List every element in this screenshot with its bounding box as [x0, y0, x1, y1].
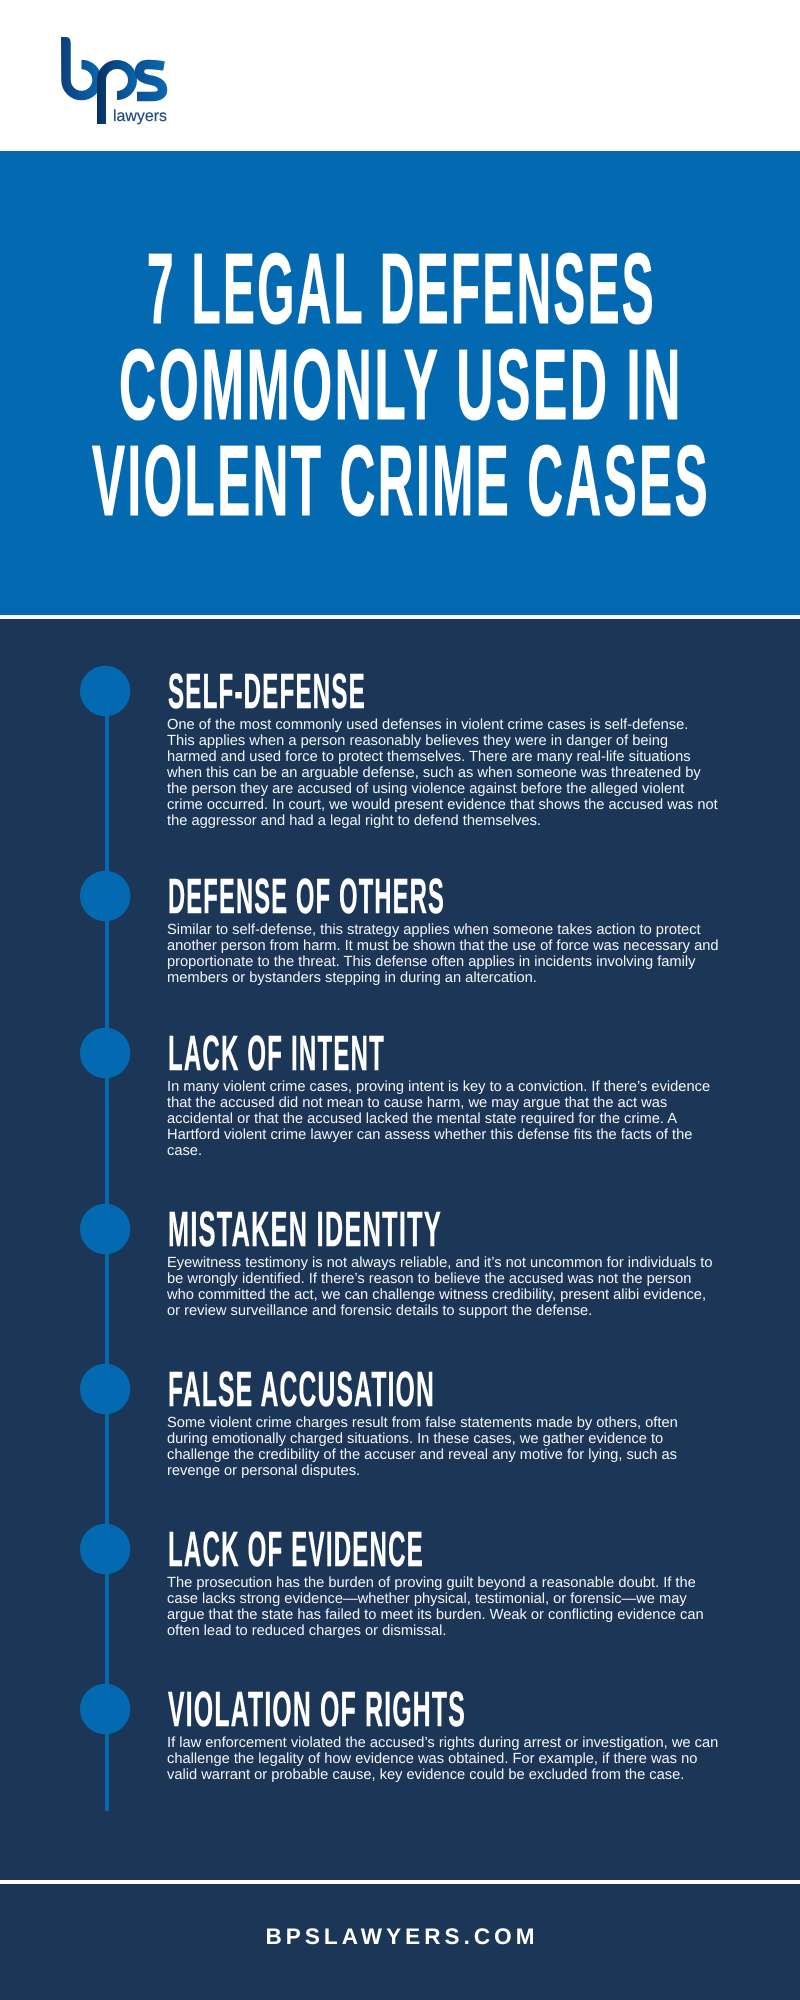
- defense: lack of intent: case.: [167, 1143, 202, 1159]
- defense: self-defense: One of the most commonly used defenses in violent crime cases is self-defense.: [167, 717, 688, 733]
- defense: defense of others: [80, 869, 723, 986]
- defense: mistaken identity: or review surveillance and forensic details to support the defense.: [167, 1303, 592, 1319]
- defense: lack of intent: [80, 1026, 714, 1159]
- defense: false accusation: Some violent crime charges result from false statements made by others, often: [167, 1415, 678, 1431]
- defense: defense of others: proportionate to the threat. This defense often applies in incidents involving family: [167, 954, 696, 970]
- defense: lack of intent: that the accused did not mean to cause harm, we may argue that the act was: [167, 1095, 667, 1111]
- defense: lack of evidence: [80, 1522, 708, 1639]
- defense: lack of evidence: case lacks strong evidence—whether physical, testimonial, or forensic—we may: [167, 1591, 687, 1607]
- defense: defense of others: DEFENSE OF OTHERS: [168, 869, 445, 924]
- defense: lack of intent: accidental or that the accused lacked the mental state required for the crime. A: [167, 1111, 677, 1127]
- defense: lack of evidence: LACK OF EVIDENCE: [168, 1522, 424, 1577]
- logo: bps lawyers: [61, 37, 167, 125]
- defense: false accusation: during emotionally charged situations. In these cases, we gather evidence to: [167, 1431, 663, 1447]
- defense: mistaken identity: MISTAKEN IDENTITY: [168, 1202, 442, 1257]
- timeline line: [105, 691, 109, 1811]
- defense: self-defense: crime occurred. In court, we would present evidence that shows the accused was not: [167, 797, 718, 813]
- defense: lack of evidence: often lead to reduced charges or dismissal.: [167, 1623, 446, 1639]
- footer: BPSLAWYERS.COM: [266, 1924, 534, 1949]
- defense: self-defense: [80, 664, 722, 829]
- defense: violation of rights: If law enforcement violated the accused’s rights during arrest or investigation, we can: [167, 1735, 718, 1751]
- defense: self-defense: the aggressor and had a legal right to defend themselves.: [167, 813, 541, 829]
- defense: false accusation: FALSE ACCUSATION: [168, 1362, 435, 1417]
- defense: self-defense: harmed and used force to protect themselves. There are many real-life situations: [167, 749, 691, 765]
- defense: self-defense: the person they are accused of using violence against before the alleged violent: [167, 781, 684, 797]
- defense: false accusation: [80, 1362, 682, 1479]
- defense: self-defense: This applies when a person reasonably believes they were in danger of being: [167, 733, 668, 749]
- defense: lack of intent: Hartford violent crime lawyer can assess whether this defense fits the facts of the: [167, 1127, 692, 1143]
- logo: bps lawyers: lawyers: [113, 108, 167, 125]
- defense: violation of rights: VIOLATION OF RIGHTS: [168, 1682, 466, 1737]
- defense: mistaken identity: be wrongly identified. If there’s reason to believe the accused was not the person: [167, 1271, 691, 1287]
- defense: defense of others: members or bystanders stepping in during an altercation.: [167, 970, 537, 986]
- white logo bar: [0, 0, 800, 151]
- defense: self-defense: SELF-DEFENSE: [168, 664, 366, 719]
- defense: mistaken identity: [80, 1202, 717, 1319]
- defense: violation of rights: valid warrant or probable cause, key evidence could be excluded from the case.: [167, 1767, 684, 1783]
- defense: mistaken identity: Eyewitness testimony is not always reliable, and it’s not uncommon for individuals to: [167, 1255, 713, 1271]
- defense: mistaken identity: who committed the act, we can challenge witness credibility, present alibi evidence,: [166, 1287, 706, 1303]
- panel: defenses timeline: [0, 619, 800, 1880]
- defense: false accusation: challenge the credibility of the accuser and reveal any motive for lying, such as: [167, 1447, 677, 1463]
- defense: lack of intent: LACK OF INTENT: [168, 1026, 385, 1081]
- defense: self-defense: when this can be an arguable defense, such as when someone was threatened by: [166, 765, 701, 781]
- defense: defense of others: another person from harm. It must be shown that the use of force was necessary and: [167, 938, 719, 954]
- title: [92, 233, 710, 537]
- footer: [0, 1884, 800, 2000]
- defense: violation of rights: [80, 1682, 722, 1783]
- defense: false accusation: revenge or personal disputes.: [167, 1463, 360, 1479]
- defense: lack of evidence: argue that the state has failed to meet its burden. Weak or conflicting evidence can: [167, 1607, 704, 1623]
- defense: violation of rights: challenge the legality of how evidence was obtained. For example, if there was no: [167, 1751, 697, 1767]
- defense: defense of others: Similar to self-defense, this strategy applies when someone takes action to protect: [167, 922, 701, 938]
- defense: lack of intent: In many violent crime cases, proving intent is key to a conviction. If there’s evidence: [167, 1079, 710, 1095]
- defense: lack of evidence: The prosecution has the burden of proving guilt beyond a reasonable doubt. If the: [167, 1575, 696, 1591]
- panel: title band: [0, 151, 800, 615]
